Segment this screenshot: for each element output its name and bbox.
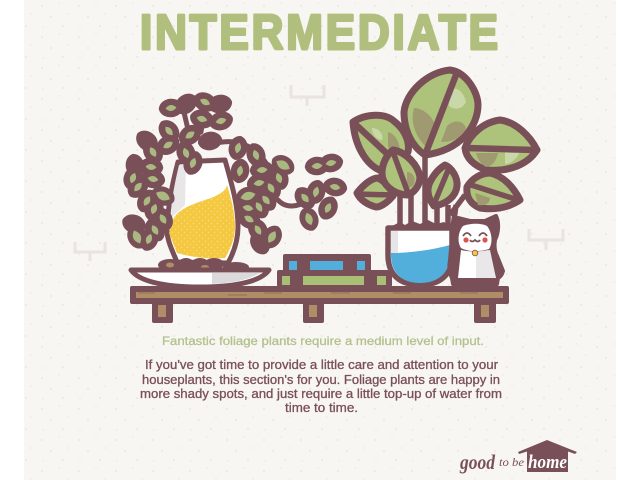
leaf: right large [465, 120, 537, 170]
body text: houseplants, this section's for you. Foliage plants are happy in [142, 373, 500, 387]
pot [388, 228, 452, 285]
leaf highlights [128, 97, 341, 245]
vase [167, 160, 238, 263]
body text: If you've got time to provide a little care and attention to your [145, 358, 498, 372]
body text: time to time. [285, 401, 358, 415]
logo: good to be home [459, 440, 577, 474]
leaf: left large [353, 115, 408, 172]
soil [392, 220, 450, 230]
logo: good to be home: to be [499, 455, 525, 469]
leaf: front left small [382, 150, 420, 195]
title: INTERMEDIATE [140, 5, 498, 60]
right plant: patterned leaves in blue pot [353, 70, 537, 285]
plate [131, 270, 269, 287]
maneki-neko lucky cat [449, 216, 503, 288]
shelf legs [152, 300, 496, 323]
subheading: Fantastic foliage plants require a medium level of input. [162, 334, 484, 348]
leaf: far left small [357, 178, 393, 207]
leaf: right lower [467, 173, 520, 209]
top book [283, 254, 371, 272]
soil [158, 258, 249, 272]
stems [400, 155, 465, 228]
body text: more shady spots, and just require a little top-up of water from [140, 387, 502, 401]
leaf masses [123, 93, 345, 254]
stems [183, 106, 320, 206]
faint wall brackets [75, 85, 563, 261]
shelf board [130, 286, 509, 304]
bottom book [277, 270, 392, 287]
leaf: centre small [428, 165, 457, 206]
left plant: trailing foliage in white and yellow vase [123, 93, 345, 287]
leaf: top large [404, 70, 478, 155]
logo: good to be home: home [528, 452, 568, 473]
body text [140, 358, 502, 415]
wooden shelf [130, 286, 509, 323]
stacked books [277, 254, 392, 287]
logo: good to be home: good [459, 450, 495, 474]
